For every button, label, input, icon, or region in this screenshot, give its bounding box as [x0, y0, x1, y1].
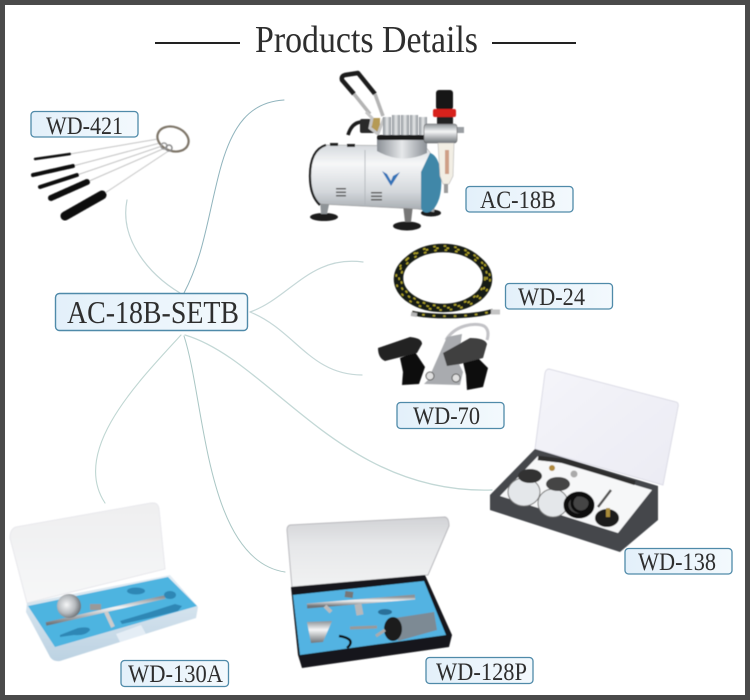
vents — [336, 188, 382, 200]
white tray — [500, 456, 652, 533]
airbrush — [538, 458, 635, 483]
label: WD-130A: WD-130A — [128, 661, 223, 688]
wire tool — [598, 490, 611, 507]
title: Products Details: Products Details — [255, 19, 478, 61]
compressor feet — [310, 200, 441, 230]
label: WD-70 — [397, 402, 504, 430]
clear base — [26, 575, 198, 661]
regulator — [436, 90, 453, 110]
icon: cleaning brushes WD-421 — [33, 122, 192, 216]
icon: airbrush kit WD-130A — [10, 503, 198, 661]
bottle — [395, 612, 437, 641]
clear lid — [287, 517, 449, 587]
right clip — [463, 358, 488, 390]
label: WD-70: WD-70 — [413, 403, 480, 430]
label: AC-18B-SETB: AC-18B-SETB — [67, 294, 239, 330]
label: AC-18B: AC-18B — [480, 187, 556, 214]
dark case — [490, 449, 658, 552]
blue foam tray — [293, 581, 446, 655]
jars — [508, 478, 540, 506]
chrome airbrush — [46, 597, 165, 624]
V logo — [382, 171, 400, 186]
head collar — [377, 136, 427, 159]
black hose piece — [339, 636, 351, 648]
label: WD-24 — [506, 284, 612, 311]
black case — [291, 575, 452, 668]
valve — [595, 509, 619, 527]
compressor handle — [342, 73, 375, 94]
lid tab — [116, 625, 146, 642]
compressor body cylinder — [310, 145, 436, 212]
chrome airbrush — [307, 597, 415, 606]
icon: air compressor AC-18B — [310, 73, 464, 230]
label: WD-24: WD-24 — [518, 284, 585, 311]
black hose coil — [566, 494, 592, 516]
connector curves from AC-18B-SETB to the products — [96, 100, 492, 572]
label: WD-128P: WD-128P — [436, 659, 527, 686]
foam cutouts — [60, 588, 182, 637]
translucent lid — [10, 503, 165, 603]
nozzle part — [350, 627, 377, 628]
icon: airbrush kit WD-128P — [287, 517, 452, 668]
icon: airbrush holder WD-70 — [378, 324, 488, 390]
blue end cap — [421, 153, 441, 213]
left clip — [400, 352, 425, 385]
icon: airbrush kit WD-138 — [490, 369, 678, 552]
metal cup — [307, 621, 332, 643]
clear lid — [535, 369, 678, 485]
label: WD-421: WD-421 — [46, 113, 123, 140]
blue foam tray — [28, 577, 197, 647]
label: WD-138: WD-138 — [638, 549, 716, 576]
cooling fins — [383, 115, 427, 135]
icon: braided air hose WD-24 — [396, 246, 500, 316]
